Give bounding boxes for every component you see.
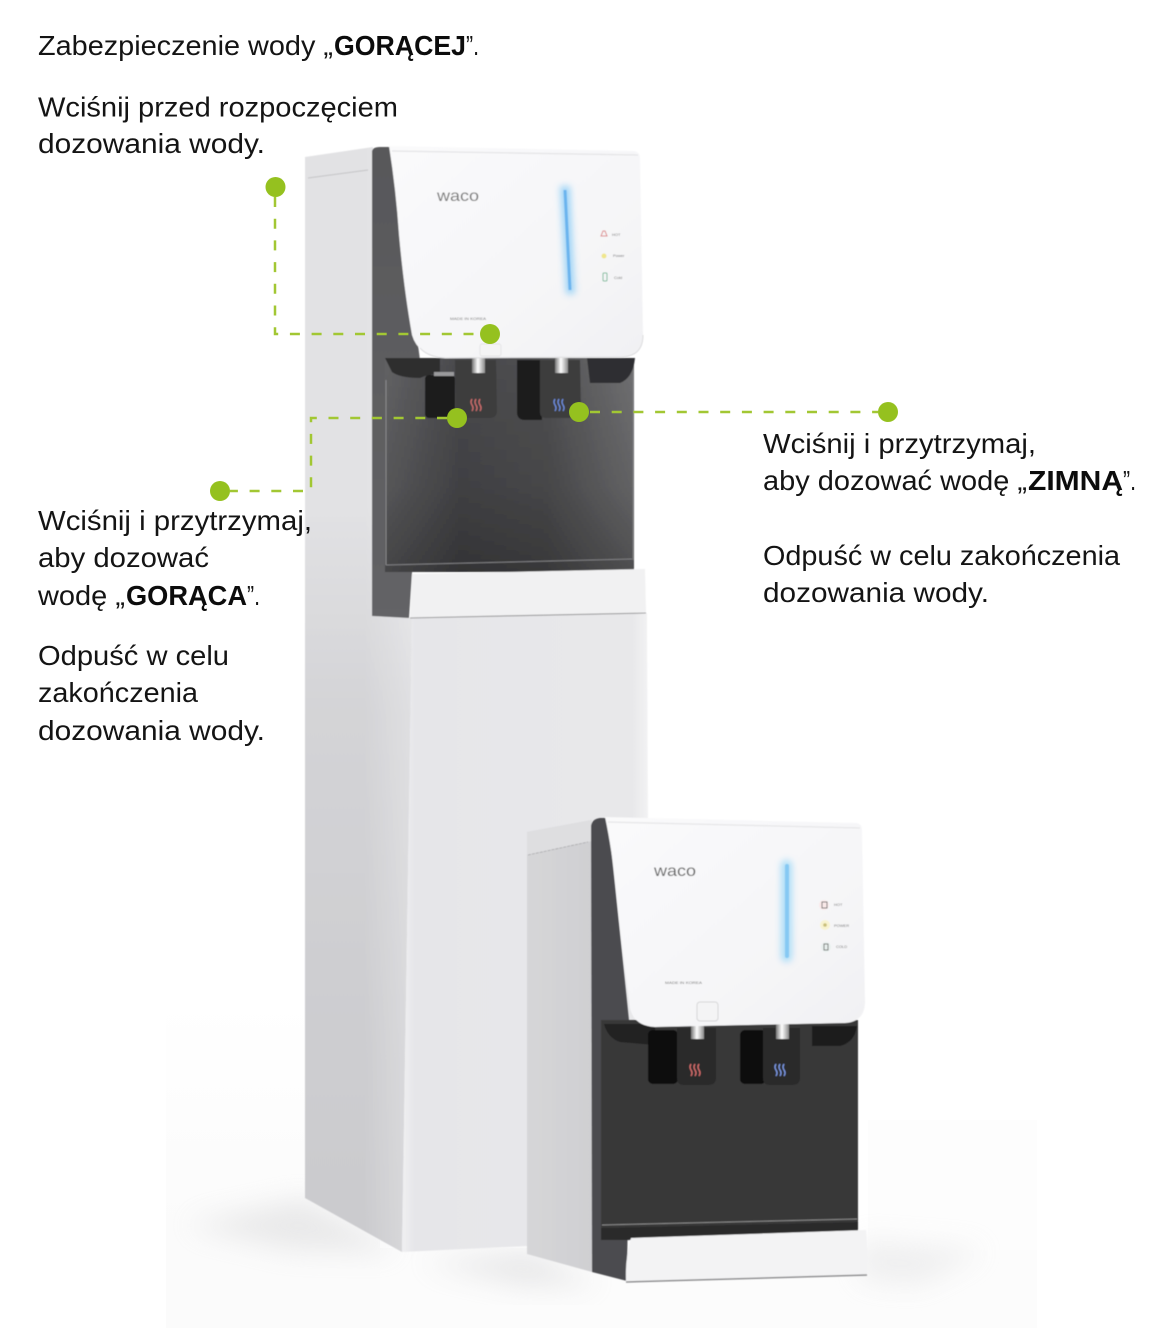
tall unit: blue light bar [560,186,575,294]
tall unit: status indicators: HOT [612,232,621,237]
small unit: dark spine [591,818,630,1281]
background floor haze [166,1000,1037,1328]
small unit: hot tap [648,1023,716,1085]
text: hot water instructions: wodę „ [37,580,125,611]
callout: safety button connector [266,177,500,344]
small unit: status indicators: HOT [834,902,843,907]
small unit: status indicators: POWER [834,923,849,928]
callout: cold tap connector [569,402,898,422]
text: cold water instructions: ZIMNĄ [1028,465,1123,496]
tall unit: made in label: MADE IN KOREA [450,316,486,321]
small unit: dispensing recess [601,1020,858,1240]
small unit: button [697,1002,718,1021]
tall water dispenser [305,146,650,1252]
small unit: status indicators: COLD [836,944,847,949]
text: hot water safety: Wciśnij przed rozpoczęciem [38,92,398,122]
text: hot water instructions: Odpuść w celu [38,640,229,671]
tall unit: status indicators [601,231,625,281]
tall unit: top head [389,146,643,358]
text: hot water instructions: Wciśnij i przytrzymaj, [38,505,312,536]
text: hot water instructions: ”. [247,580,260,611]
text: hot water instructions: zakończenia [38,677,198,708]
tall unit: hot tap [425,358,497,418]
small unit: status indicators [819,900,849,952]
small unit: made in label: MADE IN KOREA [665,980,702,985]
tall unit: front column [402,613,650,1252]
tall unit: small button [480,344,501,356]
tall unit: cold tap [517,358,581,420]
text: hot water safety: dozowania wody. [38,128,265,159]
small countertop water dispenser [527,817,867,1282]
small unit: top head [605,817,865,1027]
tall unit: status indicators: Cold [614,275,622,280]
tall unit: dark spine [372,147,420,618]
text: hot water instructions: dozowania wody. [38,715,265,746]
small unit: logo: waco [653,863,696,880]
text: hot water instructions [37,505,312,746]
text: cold water instructions: aby dozować wodę „ [763,465,1027,496]
text: hot water safety: ”. [466,30,479,61]
text: cold water instructions: dozowania wody. [763,577,989,608]
tall unit: drip tray [410,569,646,618]
small unit: drip tray [626,1230,867,1282]
callout lines and dots [210,177,898,501]
text: hot water safety: GORĄCEJ [334,30,466,61]
callout: hot tap connector [210,408,467,501]
text: cold water instructions: ”. [1123,465,1136,496]
small unit: side panel [527,820,592,1272]
small unit: cold tap [740,1023,800,1085]
tall unit: dispensing recess [385,358,635,572]
small unit: blue light bar [781,860,792,962]
text: cold water instructions: Odpuść w celu zakończenia [763,540,1120,571]
text: hot water instructions: aby dozować [38,542,209,573]
text: cold water instructions [763,428,1136,608]
text: cold water instructions: Wciśnij i przytrzymaj, [763,428,1036,459]
text: hot water safety [38,30,479,159]
tall unit: logo: waco [436,188,479,205]
tall unit: status indicators: Power [613,253,625,258]
text: hot water safety: Zabezpieczenie wody „ [38,30,333,61]
text: hot water instructions: GORĄCA [126,580,247,611]
tall unit: side panel [305,147,412,1252]
